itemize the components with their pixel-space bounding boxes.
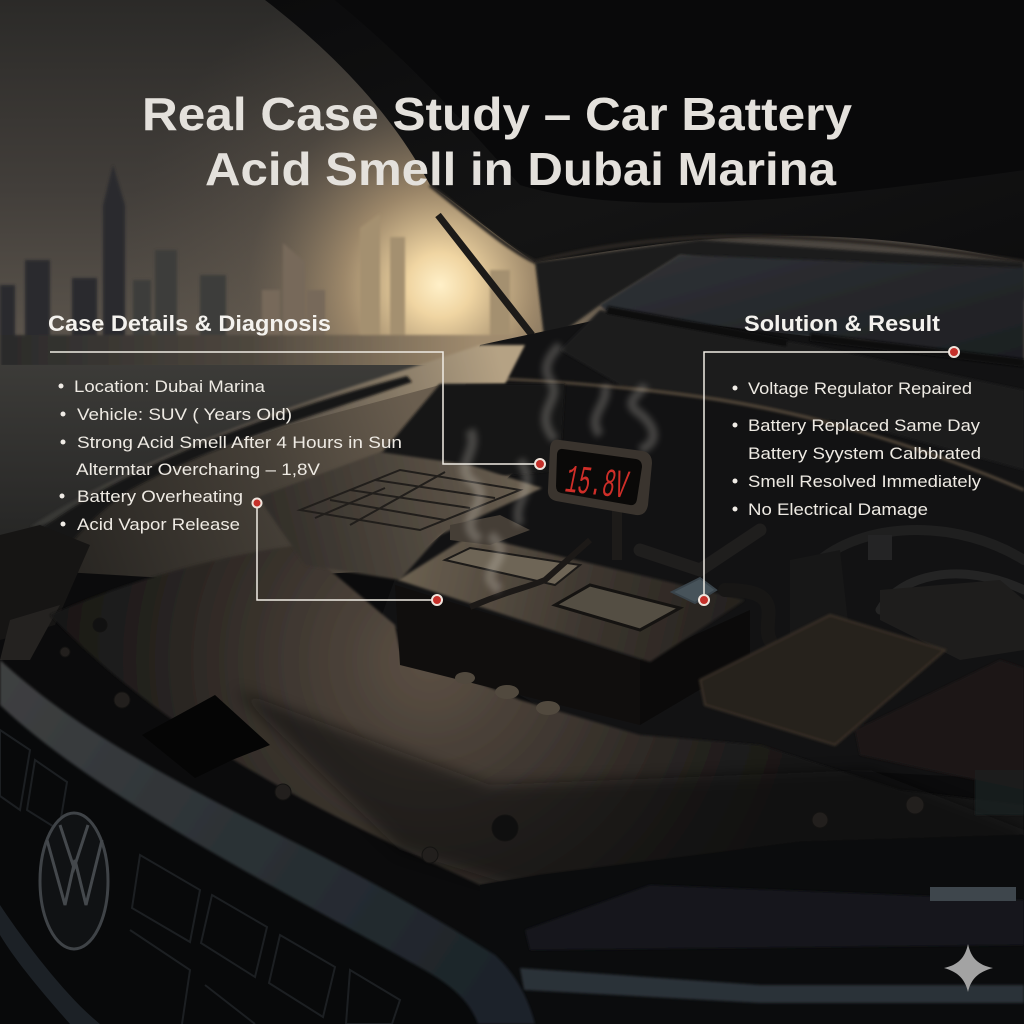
fender surface (30, 345, 525, 527)
callout connector: solution to battery terminal (699, 347, 959, 605)
bodywork below the fender shadow (30, 385, 540, 580)
icon: sparkle watermark (944, 944, 993, 992)
scuttle panel with wipers and rails (420, 310, 1024, 490)
list: case details: Strong Acid Smell After 4 Hours in Sun (77, 433, 402, 452)
list: solution and result: Battery Replaced Same Day (748, 416, 981, 435)
lower left trim (0, 905, 100, 1024)
list: case details: Location: Dubai Marina (74, 377, 266, 396)
dark fender shadow band (20, 376, 412, 570)
left fuse bracket details (0, 525, 90, 660)
list: solution and result: Battery Syystem Calbbrated (748, 444, 981, 463)
list: solution and result: Voltage Regulator Repaired (748, 379, 972, 398)
battery base caps (455, 672, 560, 715)
callout connector: overheating to battery (252, 498, 442, 605)
list: solution and result (732, 379, 982, 519)
list: case details: Battery Overheating (77, 487, 243, 506)
right plastic covers (700, 615, 1024, 815)
list: case details (58, 377, 402, 534)
voltmeter display: 15.8V (563, 460, 631, 511)
scuttle shadow under the bonnet (535, 240, 1024, 345)
VW badge (40, 813, 108, 949)
acid vapour smoke (465, 345, 653, 590)
background: dusk sky with sun glow (0, 0, 1024, 420)
list: case details: Altermtar Overcharing – 1,8V (76, 460, 321, 479)
voltmeter display (548, 440, 652, 560)
dark slot in shroud (142, 695, 270, 778)
engine bay base (380, 315, 1024, 780)
shroud bolts (60, 618, 924, 863)
callout connector: diagnosis to voltmeter (50, 352, 545, 469)
dark bay under the sunlit rail (380, 384, 565, 480)
water (0, 365, 620, 540)
list: solution and result: No Electrical Damage (748, 500, 928, 519)
battery (395, 515, 750, 725)
title (142, 88, 852, 195)
Dubai Marina skyline (0, 165, 560, 367)
windscreen (600, 255, 1024, 375)
battery cover with grid (258, 452, 542, 580)
heading: solution and result: Solution & Result (744, 311, 941, 336)
lower right grille area (480, 835, 1024, 1024)
front bumper trim band (0, 660, 535, 1024)
large plastic engine shroud (50, 545, 1024, 885)
list: case details: Vehicle: SUV ( Years Old) (77, 405, 292, 424)
open bonnet underside (265, 0, 1024, 262)
title: Real Case Study – Car Battery (142, 88, 852, 140)
bonnet strut (438, 215, 532, 335)
shroud lower step shadow (235, 690, 1024, 900)
hoses and terminal (640, 530, 1024, 640)
list: solution and result: Smell Resolved Immediately (748, 472, 982, 491)
title: Acid Smell in Dubai Marina (205, 143, 836, 195)
heading: case details and diagnosis: Case Details & Diagnosis (48, 311, 331, 336)
engine ancillaries (790, 535, 1024, 660)
list: case details: Acid Vapor Release (77, 515, 240, 534)
front grille left (0, 700, 500, 1024)
